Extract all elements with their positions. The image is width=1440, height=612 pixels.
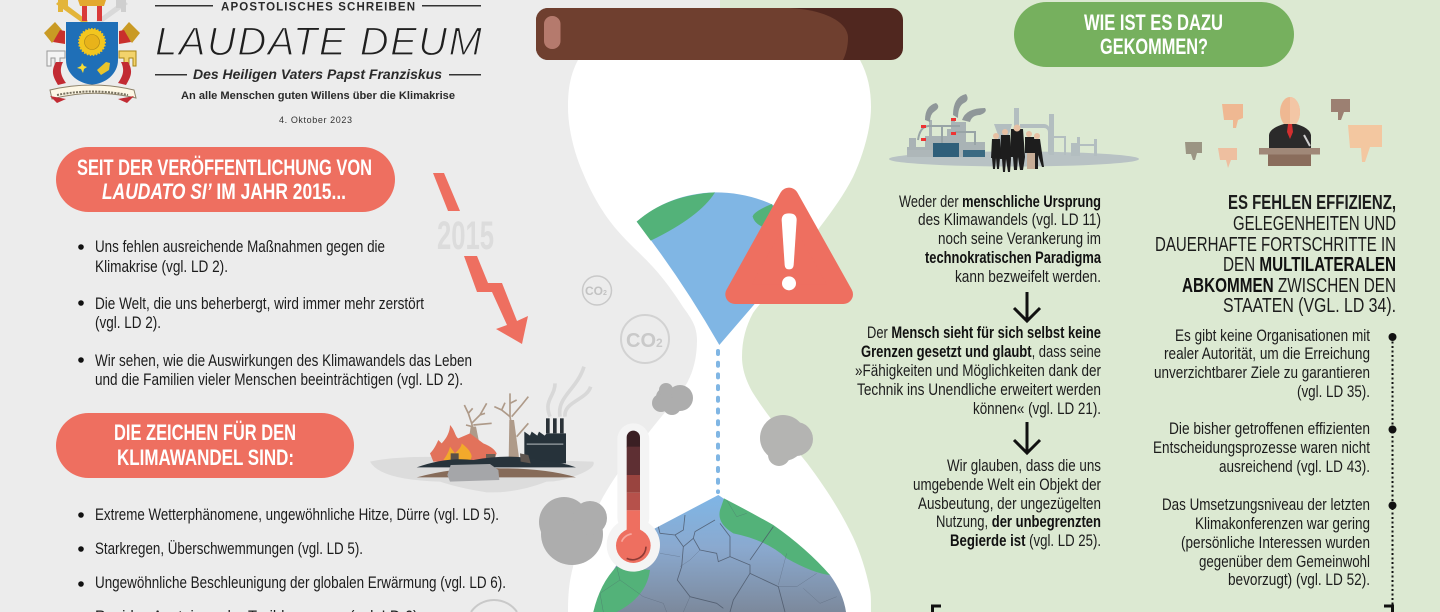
bracket corner left xyxy=(932,606,941,612)
header title block xyxy=(155,2,483,125)
heading pill: how did it happen xyxy=(1014,2,1294,67)
thumbs down icons xyxy=(1185,99,1382,168)
list: since 2015: Wir sehen, wie die Auswirkungen des Klimawandels das Leben xyxy=(95,352,472,370)
arrow down 2 xyxy=(1014,422,1040,453)
hourglass white silhouette xyxy=(568,60,871,612)
list: climate signs: Extreme Wetterphänomene, ungewöhnliche Hitze, Dürre (vgl. LD 5). xyxy=(95,506,499,524)
text: causes block 3: Ausbeutung, der ungezügelten xyxy=(918,495,1101,513)
list: since 2015: (vgl. LD 2). xyxy=(95,314,161,332)
text: causes block 3: umgebende Welt ein Objekt der xyxy=(913,476,1101,494)
text: causes block 2: Grenzen gesetzt und glaubt, dass seine xyxy=(861,343,1101,361)
thermometer xyxy=(607,423,660,572)
cracks xyxy=(658,515,785,612)
subtitle: author: Des Heiligen Vaters Papst Franziskus xyxy=(193,67,443,82)
text: causes block 1: Weder der menschliche Ursprung xyxy=(899,193,1101,211)
list: climate signs xyxy=(78,506,506,612)
list: since 2015: Die Welt, die uns beherbergt, wird immer mehr zerstört xyxy=(95,295,424,313)
text: causes block 2: Der Mensch sieht für sich selbst keine xyxy=(867,324,1101,342)
heading pill: how did it happen: GEKOMMEN? xyxy=(1100,34,1208,59)
CO2 icon small xyxy=(582,276,612,305)
title: Laudate Deum: LAUDATE DEUM xyxy=(155,20,483,64)
list: climate signs: Ungewöhnliche Beschleunigung der globalen Erwärmung (vgl. LD 6). xyxy=(95,574,506,592)
heading pill: signs: KLIMAWANDEL SIND: xyxy=(117,445,294,470)
dotted timeline xyxy=(1388,333,1396,606)
text: agreements points: Entscheidungsprozesse waren nicht xyxy=(1153,439,1370,457)
list: since 2015: Klimakrise (vgl. LD 2). xyxy=(95,258,228,276)
heading pill: signs: DIE ZEICHEN FÜR DEN xyxy=(114,420,296,445)
date: 4. Oktober 2023 xyxy=(279,115,352,125)
CO2 icon bottom xyxy=(471,600,517,612)
list: since 2015 xyxy=(78,238,472,389)
text: agreements points: Die bisher getroffenen effizienten xyxy=(1169,420,1370,438)
text: agreements points xyxy=(1153,327,1370,589)
heading: lack of efficiency: DEN MULTILATERALEN xyxy=(1223,254,1396,276)
text: causes block 1: des Klimawandels (vgl. LD 11) xyxy=(918,211,1101,229)
heading pill: since 2015: SEIT DER VERÖFFENTLICHUNG VON xyxy=(77,155,372,180)
document type label: APOSTOLISCHES SCHREIBEN xyxy=(221,2,415,14)
text: causes block 1 xyxy=(899,193,1102,286)
heading pill: since 2015 xyxy=(56,147,395,212)
falling sand dotted line xyxy=(716,351,720,492)
text: causes block 3: Nutzung, der unbegrenzten xyxy=(936,513,1101,531)
illustration: industry and business people xyxy=(889,94,1139,172)
text: agreements points: gegenüber dem Gemeinwohl xyxy=(1199,553,1370,571)
arrow with 2015 label: 2015 xyxy=(437,214,494,258)
text: causes block 2 xyxy=(855,324,1101,418)
CO2 icon large: CO2 xyxy=(626,330,663,352)
text: causes block 2: »Fähigkeiten und Möglichkeiten dank der xyxy=(855,362,1101,380)
land bands xyxy=(719,498,830,575)
subtitle: addressees: An alle Menschen guten Willens über die Klimakrise xyxy=(181,90,455,102)
text: causes block 2: können« (vgl. LD 21). xyxy=(973,400,1101,418)
text: causes block 3 xyxy=(913,457,1101,550)
text: agreements points: Es gibt keine Organisationen mit xyxy=(1175,327,1370,345)
hourglass top cap xyxy=(536,8,903,60)
text: agreements points: ausreichend (vgl. LD 43). xyxy=(1219,458,1370,476)
globe upper part with water and land xyxy=(637,192,787,345)
text: causes block 3: Wir glauben, dass die uns xyxy=(947,457,1101,475)
heading: lack of efficiency xyxy=(1155,192,1396,317)
CO2 icon small: CO2 xyxy=(585,284,607,298)
business people xyxy=(991,129,1044,172)
coat of arms crest xyxy=(44,0,140,103)
smoke cloud left xyxy=(539,497,607,565)
CO2 icon large xyxy=(621,315,669,363)
warning triangle icon xyxy=(735,197,843,294)
right background panel xyxy=(720,0,1440,612)
illustration: speaker at podium with thumbs down xyxy=(1185,97,1382,168)
text: agreements points: unverzichtbarer Ziele zu garantieren xyxy=(1154,364,1370,382)
arrow down 1 xyxy=(1014,292,1040,321)
text: agreements points: bevorzugt) (vgl. LD 52). xyxy=(1228,571,1370,589)
heading pill: since 2015: LAUDATO SI’ IM JAHR 2015... xyxy=(102,179,346,204)
text: agreements points: (persönliche Interessen wurden xyxy=(1181,534,1370,552)
smoke cloud small xyxy=(652,383,693,415)
list: since 2015: und die Familien vieler Menschen beeinträchtigen (vgl. LD 2). xyxy=(95,371,463,389)
text: agreements points: realer Autorität, um die Erreichung xyxy=(1164,345,1370,363)
heading pill: signs xyxy=(56,413,354,478)
illustration: fire and factory xyxy=(370,367,594,492)
text: agreements points: (vgl. LD 35). xyxy=(1297,383,1370,401)
heading: lack of efficiency: STAATEN (VGL. LD 34). xyxy=(1223,295,1396,317)
text: causes block 1: noch seine Verankerung im xyxy=(938,230,1101,248)
text: causes block 3: Begierde ist (vgl. LD 25). xyxy=(950,532,1101,550)
text: agreements points: Klimakonferenzen war gering xyxy=(1195,515,1370,533)
text: causes block 2: Technik ins Unendliche erweitert werden xyxy=(857,381,1101,399)
cracked globe lower part xyxy=(593,495,846,612)
list: since 2015: Uns fehlen ausreichende Maßnahmen gegen die xyxy=(95,238,385,256)
left background panel xyxy=(0,0,720,612)
text: agreements points: Das Umsetzungsniveau der letzten xyxy=(1162,496,1370,514)
heading: lack of efficiency: ABKOMMEN ZWISCHEN DEN xyxy=(1182,275,1396,297)
bracket corner right xyxy=(1384,606,1392,612)
smoke cloud right xyxy=(760,415,813,466)
text: causes block 1: technokratischen Paradigma xyxy=(925,249,1102,267)
list: climate signs: Starkregen, Überschwemmungen (vgl. LD 5). xyxy=(95,540,363,558)
arrow with 2015 label xyxy=(433,173,528,344)
heading pill: how did it happen: WIE IST ES DAZU xyxy=(1084,10,1223,35)
text: causes block 1: kann bezweifelt werden. xyxy=(955,268,1101,286)
